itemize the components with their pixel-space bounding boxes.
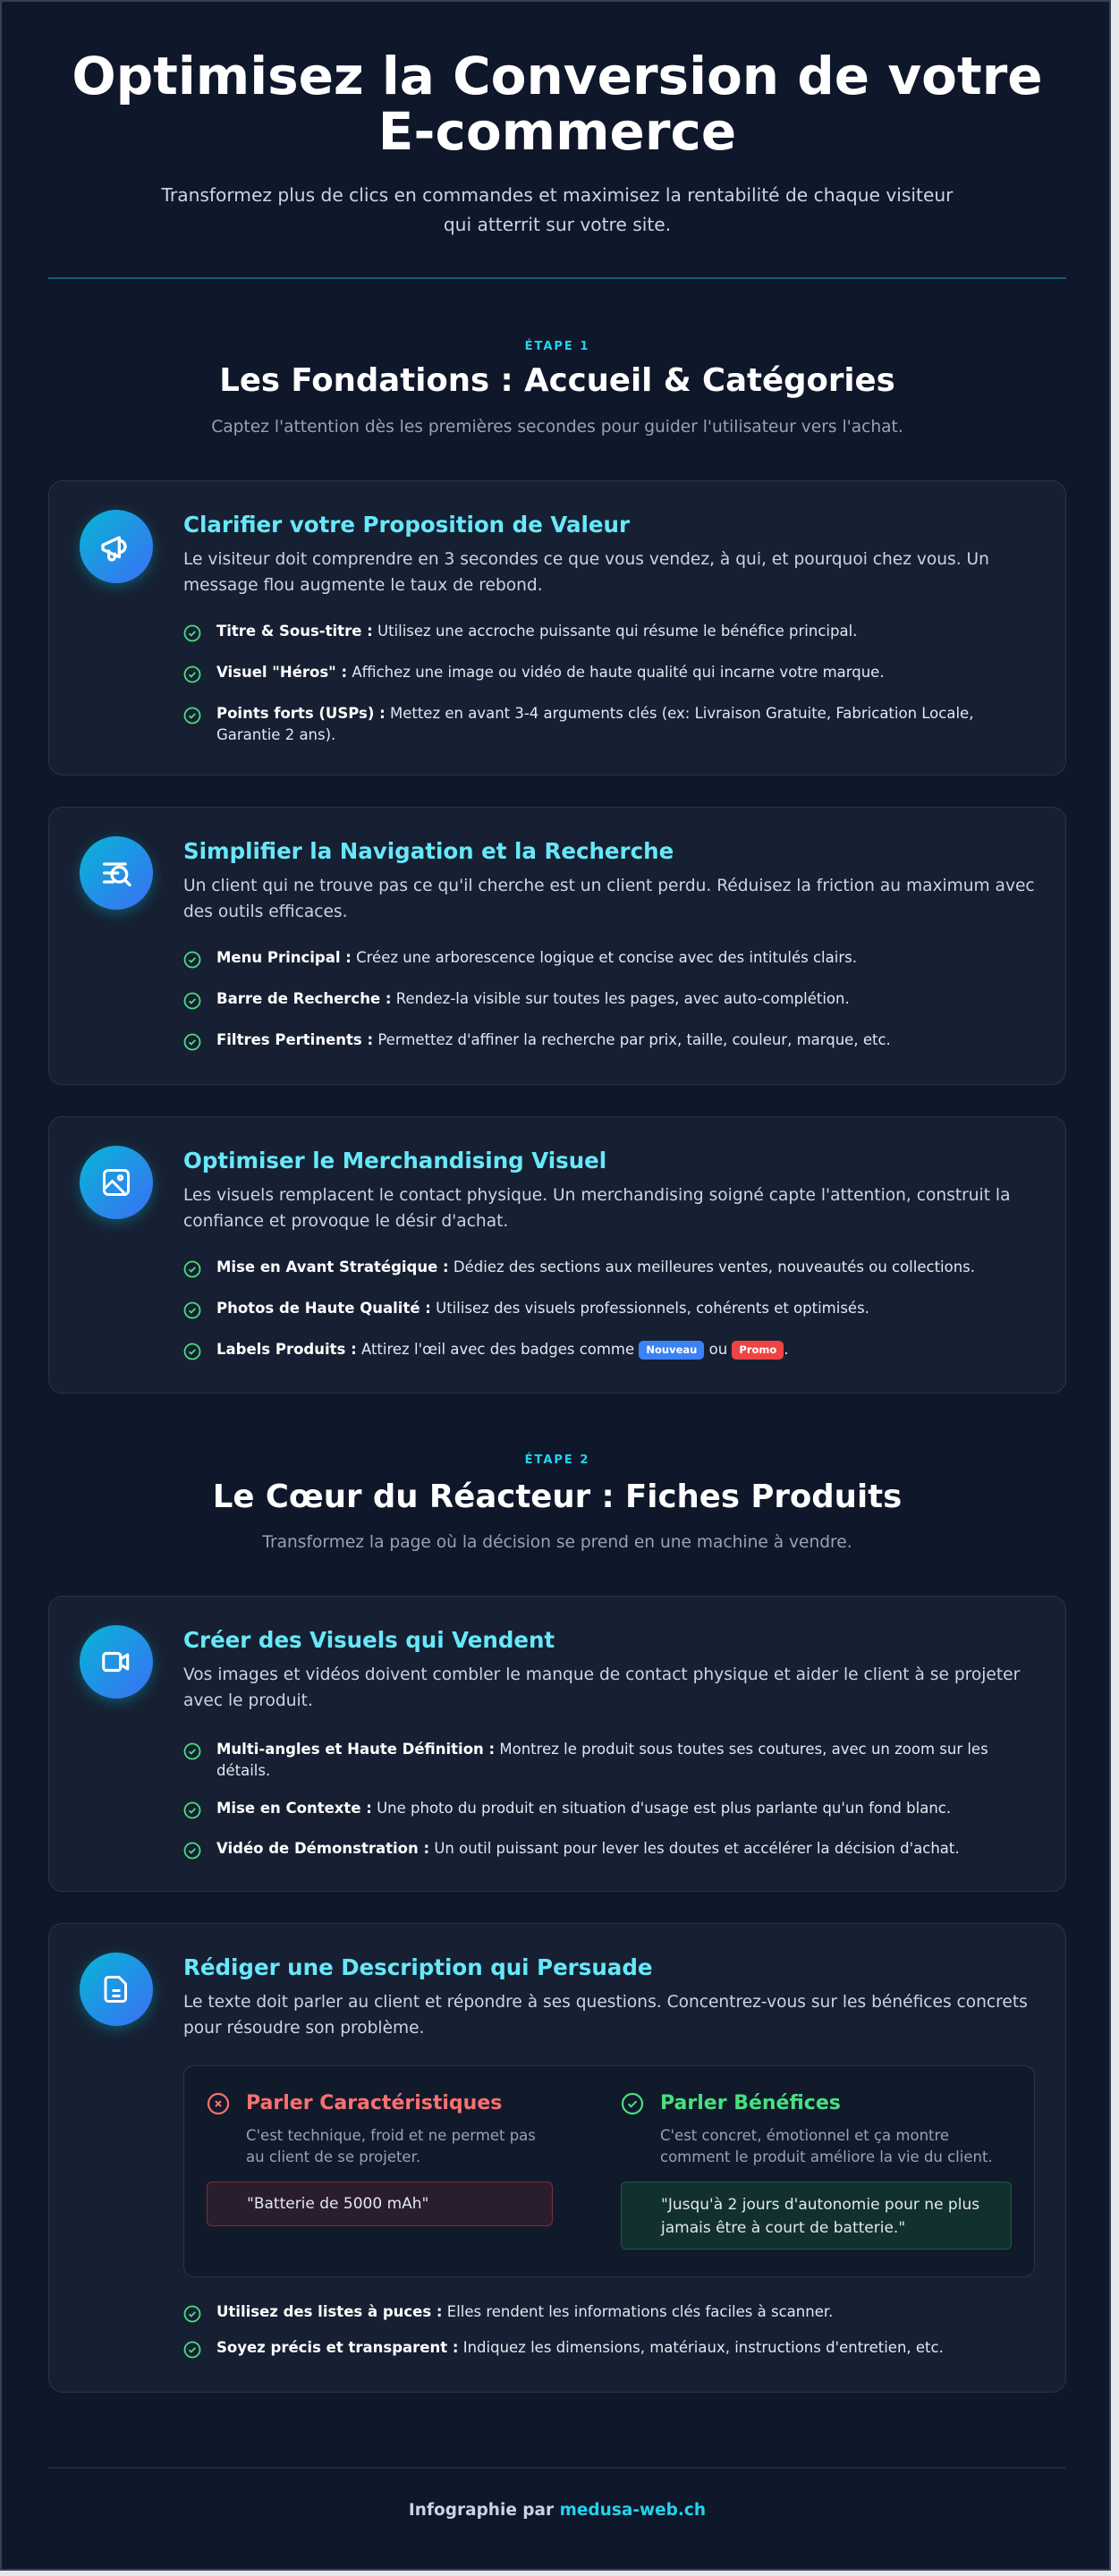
bullet list: [184, 949, 891, 1050]
quote: good example: [621, 2182, 1012, 2250]
section 1 heading: Les Fondations : Accueil & Catégories: [219, 362, 895, 399]
icon: video: [80, 1625, 153, 1699]
column: features: C'est technique, froid et ne permet pas au client de se projeter.: [246, 2127, 536, 2165]
bullet list: Visuel "Héros" : Affichez une image ou vidéo de haute qualité qui incarne votre marque.: [216, 664, 885, 681]
step 2 label: ÉTAPE 2: [525, 1453, 589, 1467]
bullet list: Titre & Sous-titre : Utilisez une accroche puissante qui résume le bénéfice principal.: [216, 623, 857, 640]
icon: document: [80, 1953, 153, 2026]
card description: Les visuels remplacent le contact physique. Un merchandising soigné capte l'attention, construit la confiance et provoque le désir d'achat.: [183, 1186, 1010, 1231]
quote: bad example: "Batterie de 5000 mAh": [247, 2195, 428, 2213]
section 2 subtitle: Transformez la page où la décision se prend en une machine à vendre.: [262, 1533, 852, 1552]
card title: Clarifier votre Proposition de Valeur: [183, 512, 630, 538]
card description: Le texte doit parler au client et répondre à ses questions. Concentrez-vous sur les bénéfices concrets pour résoudre son problème.: [183, 1993, 1028, 2038]
title: E-commerce: [378, 101, 736, 162]
column: benefits: [621, 2092, 1012, 2250]
icon: image: [80, 1146, 153, 1219]
comparison box: [183, 2065, 1035, 2277]
bullet list: Vidéo de Démonstration : Un outil puissant pour lever les doutes et accélérer la décision d'achat.: [216, 1840, 960, 1857]
bullet list: Labels Produits : Attirez l'œil avec des badges comme ou .: [216, 1341, 789, 1358]
panel: visuals: [48, 1596, 1066, 1892]
bullet list: Utilisez des listes à puces : Elles rendent les informations clés faciles à scanner.: [216, 2303, 833, 2320]
panel: merchandising: [48, 1116, 1066, 1394]
icon: check: [621, 2093, 644, 2114]
bullet list: Filtres Pertinents : Permettez d'affiner la recherche par prix, taille, couleur, marque, etc.: [216, 1031, 891, 1048]
title: [72, 46, 1043, 162]
card title: Rédiger une Description qui Persuade: [183, 1954, 652, 1980]
card title: Simplifier la Navigation et la Recherche: [183, 838, 674, 864]
bullet list: Mise en Contexte : Une photo du produit en situation d'usage est plus parlante qu'un fond blanc.: [216, 1800, 951, 1817]
section 1 subtitle: Captez l'attention dès les premières secondes pour guider l'utilisateur vers l'achat.: [211, 418, 903, 436]
bullet list: Mise en Avant Stratégique : Dédiez des sections aux meilleures ventes, nouveautés ou collections.: [216, 1258, 975, 1275]
panel: value proposition: [48, 480, 1066, 775]
bullet list: [184, 1741, 988, 1859]
bullet list: Photos de Haute Qualité : Utilisez des visuels professionnels, cohérents et optimisés.: [216, 1300, 869, 1317]
footer: Infographie par medusa-web.ch: [409, 2501, 706, 2520]
bullet list: [184, 623, 973, 743]
card description: Un client qui ne trouve pas ce qu'il cherche est un client perdu. Réduisez la friction au maximum avec des outils efficaces.: [183, 877, 1035, 921]
bullet list: Points forts (USPs) : Mettez en avant 3-4 arguments clés (ex: Livraison Gratuite, Fabrication Locale, Garantie 2 ans).: [216, 705, 973, 743]
icon: search: [80, 836, 153, 910]
card title: Optimiser le Merchandising Visuel: [183, 1148, 606, 1174]
subtitle: Transformez plus de clics en commandes et maximisez la rentabilité de chaque visiteur qui atterrit sur votre site.: [162, 184, 953, 235]
bullet list: Multi-angles et Haute Définition : Montrez le produit sous toutes ses coutures, avec un zoom sur les détails.: [216, 1741, 988, 1779]
section 2 heading: Le Cœur du Réacteur : Fiches Produits: [213, 1479, 902, 1515]
card description: Vos images et vidéos doivent combler le manque de contact physique et aider le client à se projeter avec le produit.: [183, 1665, 1020, 1710]
column: benefits: C'est concret, émotionnel et ça montre comment le produit améliore la vie du client.: [660, 2127, 993, 2165]
column: features: [207, 2092, 553, 2226]
card description: Le visiteur doit comprendre en 3 secondes ce que vous vendez, à qui, et pourquoi chez vous. Un message flou augmente le taux de rebond.: [183, 550, 989, 595]
step 1 label: ÉTAPE 1: [525, 340, 589, 353]
quote: bad example: [207, 2182, 553, 2226]
column: features: Parler Caractéristiques: [246, 2092, 502, 2114]
bullet list: Nouveau: [646, 1343, 697, 1356]
panel: navigation: [48, 807, 1066, 1085]
bullet list: Soyez précis et transparent : Indiquez les dimensions, matériaux, instructions d'entretien, etc.: [216, 2339, 944, 2356]
icon: cross: [208, 2093, 229, 2114]
bullet list: Promo: [739, 1343, 776, 1356]
bullet list: [184, 2303, 944, 2358]
bullet list: Barre de Recherche : Rendez-la visible sur toutes les pages, avec auto-complétion.: [216, 990, 850, 1007]
bullet list: Menu Principal : Créez une arborescence logique et concise avec des intitulés clairs.: [216, 949, 857, 966]
quote: good example: "Jusqu'à 2 jours d'autonomie pour ne plus jamais être à court de batterie.": [661, 2196, 979, 2237]
card title: Créer des Visuels qui Vendent: [183, 1627, 555, 1653]
column: benefits: Parler Bénéfices: [660, 2092, 841, 2114]
icon: megaphone: [80, 510, 153, 583]
panel: description: [48, 1923, 1066, 2393]
title: Optimisez la Conversion de votre: [72, 46, 1043, 106]
bullet list: [184, 1258, 975, 1360]
